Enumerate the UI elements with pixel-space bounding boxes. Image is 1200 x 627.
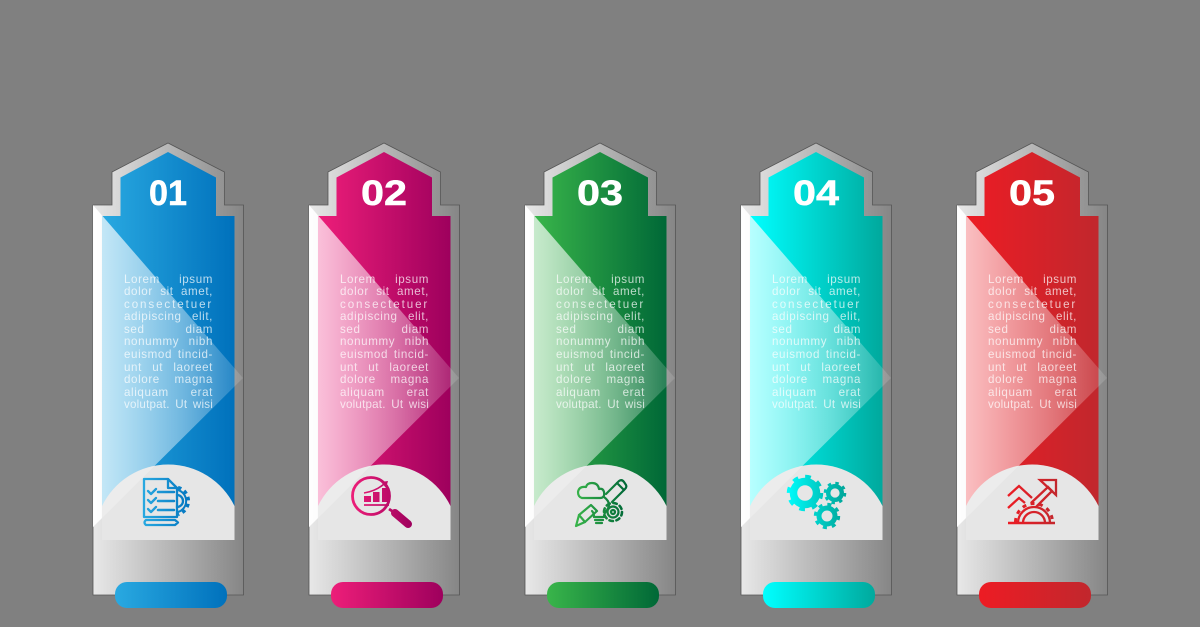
text block: unt ut laoreet — [556, 361, 645, 374]
text block: dolore magna — [340, 373, 429, 386]
text block: volutpat. Ut wisi — [340, 398, 429, 411]
text block: consectetuer — [340, 298, 429, 311]
glass highlight — [93, 205, 243, 527]
text block: adipiscing elit, — [340, 310, 429, 323]
number 01: 01 — [149, 173, 187, 213]
icon backdrop dome — [102, 464, 234, 540]
number 03: 03 — [577, 173, 623, 213]
icon: growth arrow and gear — [1008, 480, 1056, 523]
text block: aliquam erat — [988, 386, 1077, 399]
text block: Lorem ipsum — [988, 272, 1077, 286]
text block: nonummy nibh — [772, 335, 861, 348]
text block: aliquam erat — [124, 386, 213, 399]
pill button — [331, 582, 443, 608]
pill button — [547, 582, 659, 608]
panel: step 02 — [308, 142, 460, 608]
dome glass sheen — [93, 205, 243, 527]
coloured panel — [102, 152, 234, 540]
text block: unt ut laoreet — [772, 361, 861, 374]
text block: adipiscing elit, — [556, 310, 645, 323]
text block: adipiscing elit, — [988, 310, 1077, 323]
glass highlight — [309, 205, 459, 527]
dome glass sheen — [786, 466, 801, 471]
text block: dolor sit amet, — [124, 285, 213, 298]
number 04: 04 — [793, 173, 839, 213]
pill button — [115, 582, 227, 608]
text block: aliquam erat — [556, 386, 645, 399]
text block: nonummy nibh — [556, 335, 645, 348]
text block: consectetuer — [772, 298, 861, 311]
text block: dolore magna — [124, 373, 213, 386]
icon backdrop dome — [534, 464, 666, 540]
grey backing panel — [93, 143, 244, 595]
text block: sed diam — [556, 323, 645, 336]
text block: euismod tincid- — [340, 348, 429, 361]
dome glass sheen — [525, 205, 675, 527]
text block: dolor sit amet, — [556, 285, 645, 298]
text block: nonummy nibh — [340, 335, 429, 348]
text block — [340, 272, 429, 411]
dome glass sheen — [364, 466, 369, 468]
number 02: 02 — [361, 173, 407, 213]
text block: dolore magna — [988, 373, 1077, 386]
text block: nonummy nibh — [124, 335, 213, 348]
coloured panel — [750, 152, 882, 540]
text block: Lorem ipsum — [556, 272, 645, 286]
panel: step 04 — [740, 142, 892, 608]
text block: dolore magna — [772, 373, 861, 386]
text block: unt ut laoreet — [124, 361, 213, 374]
coloured panel — [318, 152, 450, 540]
text block: euismod tincid- — [556, 348, 645, 361]
text block: euismod tincid- — [988, 348, 1077, 361]
panel: step 01 — [92, 142, 244, 608]
panel: step 03 — [524, 142, 676, 608]
text block — [124, 272, 213, 411]
icon backdrop dome — [318, 464, 450, 540]
glass highlight — [525, 205, 675, 527]
text block: Lorem ipsum — [340, 272, 429, 286]
text block: consectetuer — [988, 298, 1077, 311]
text block: volutpat. Ut wisi — [556, 398, 645, 411]
dome glass sheen — [957, 205, 1107, 527]
text block: aliquam erat — [340, 386, 429, 399]
text block: unt ut laoreet — [988, 361, 1077, 374]
icon backdrop dome — [966, 464, 1098, 540]
text block: consectetuer — [556, 298, 645, 311]
text block: consectetuer — [124, 298, 213, 311]
text block: unt ut laoreet — [340, 361, 429, 374]
text block: euismod tincid- — [772, 348, 861, 361]
text block: dolor sit amet, — [988, 285, 1077, 298]
text block: dolore magna — [556, 373, 645, 386]
pill button — [763, 582, 875, 608]
icon: magnifier over bar chart — [352, 478, 408, 524]
grey backing panel — [741, 143, 892, 595]
text block: Lorem ipsum — [772, 272, 861, 286]
icon: creative cloud, bulb, pencils and gear — [576, 480, 626, 526]
text block: adipiscing elit, — [124, 310, 213, 323]
coloured panel — [534, 152, 666, 540]
text block: dolor sit amet, — [772, 285, 861, 298]
text block: sed diam — [124, 323, 213, 336]
glass highlight — [741, 205, 891, 527]
number 05: 05 — [1009, 173, 1055, 213]
text block: nonummy nibh — [988, 335, 1077, 348]
text block: sed diam — [340, 323, 429, 336]
text block — [556, 272, 645, 411]
text block: Lorem ipsum — [124, 272, 213, 286]
text block: adipiscing elit, — [772, 310, 861, 323]
text block: volutpat. Ut wisi — [772, 398, 861, 411]
coloured panel — [966, 152, 1098, 540]
text block: sed diam — [988, 323, 1077, 336]
glass highlight — [957, 205, 1107, 527]
text block: euismod tincid- — [124, 348, 213, 361]
icon: checklist with gear — [144, 479, 188, 525]
text block — [772, 272, 861, 411]
text block — [988, 272, 1077, 411]
text block: volutpat. Ut wisi — [988, 398, 1077, 411]
text block: volutpat. Ut wisi — [124, 398, 213, 411]
text block: dolor sit amet, — [340, 285, 429, 298]
grey backing panel — [957, 143, 1108, 595]
text block: sed diam — [772, 323, 861, 336]
panel: step 05 — [956, 142, 1108, 608]
text block: aliquam erat — [772, 386, 861, 399]
grey backing panel — [525, 143, 676, 595]
icon: three gears — [789, 477, 845, 528]
icon backdrop dome — [750, 464, 882, 540]
grey backing panel — [309, 143, 460, 595]
pill button — [979, 582, 1091, 608]
